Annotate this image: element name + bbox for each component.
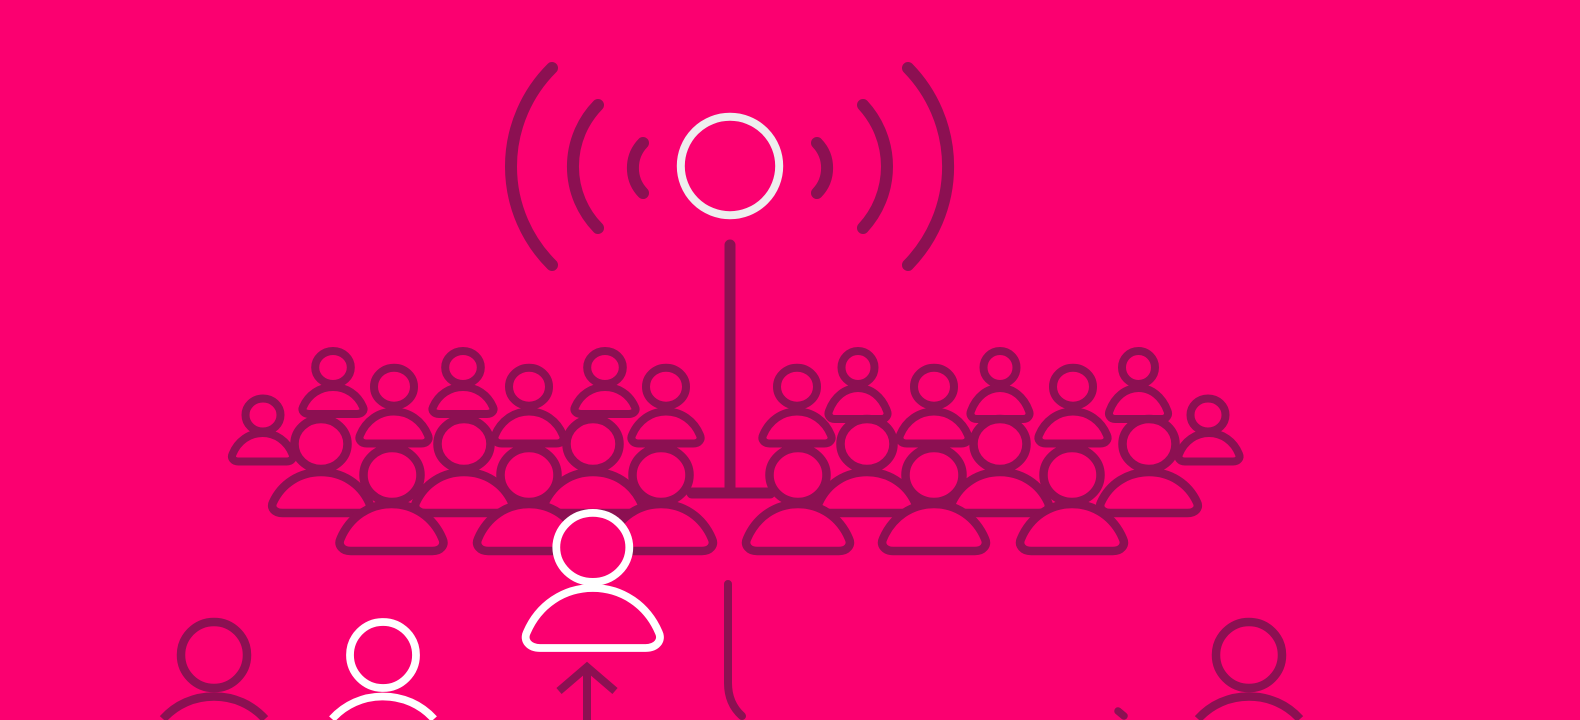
third row people bbox=[272, 419, 1198, 513]
connector: stem from signal to audience bbox=[692, 245, 770, 493]
second row people bbox=[359, 368, 1108, 444]
signal waves right bbox=[817, 68, 948, 265]
person: bottom right bbox=[1198, 622, 1300, 719]
person: highlighted above arrow bbox=[526, 513, 660, 648]
audience crowd bbox=[232, 351, 1240, 551]
person: far left bbox=[232, 398, 293, 462]
connector: curved line from crowd bbox=[728, 584, 742, 716]
arrow: partial right arrowhead bbox=[1118, 711, 1124, 716]
person: far right bbox=[1178, 398, 1240, 462]
signal source circle bbox=[681, 117, 779, 215]
front row people bbox=[340, 448, 1124, 551]
back row people bbox=[302, 351, 1168, 419]
person: bottom left bbox=[163, 622, 265, 719]
signal waves left bbox=[511, 68, 643, 265]
arrow: pointing up to highlighted person bbox=[559, 667, 615, 720]
person: bottom highlighted bbox=[332, 622, 434, 719]
icon: broadcast signal bbox=[511, 68, 948, 265]
